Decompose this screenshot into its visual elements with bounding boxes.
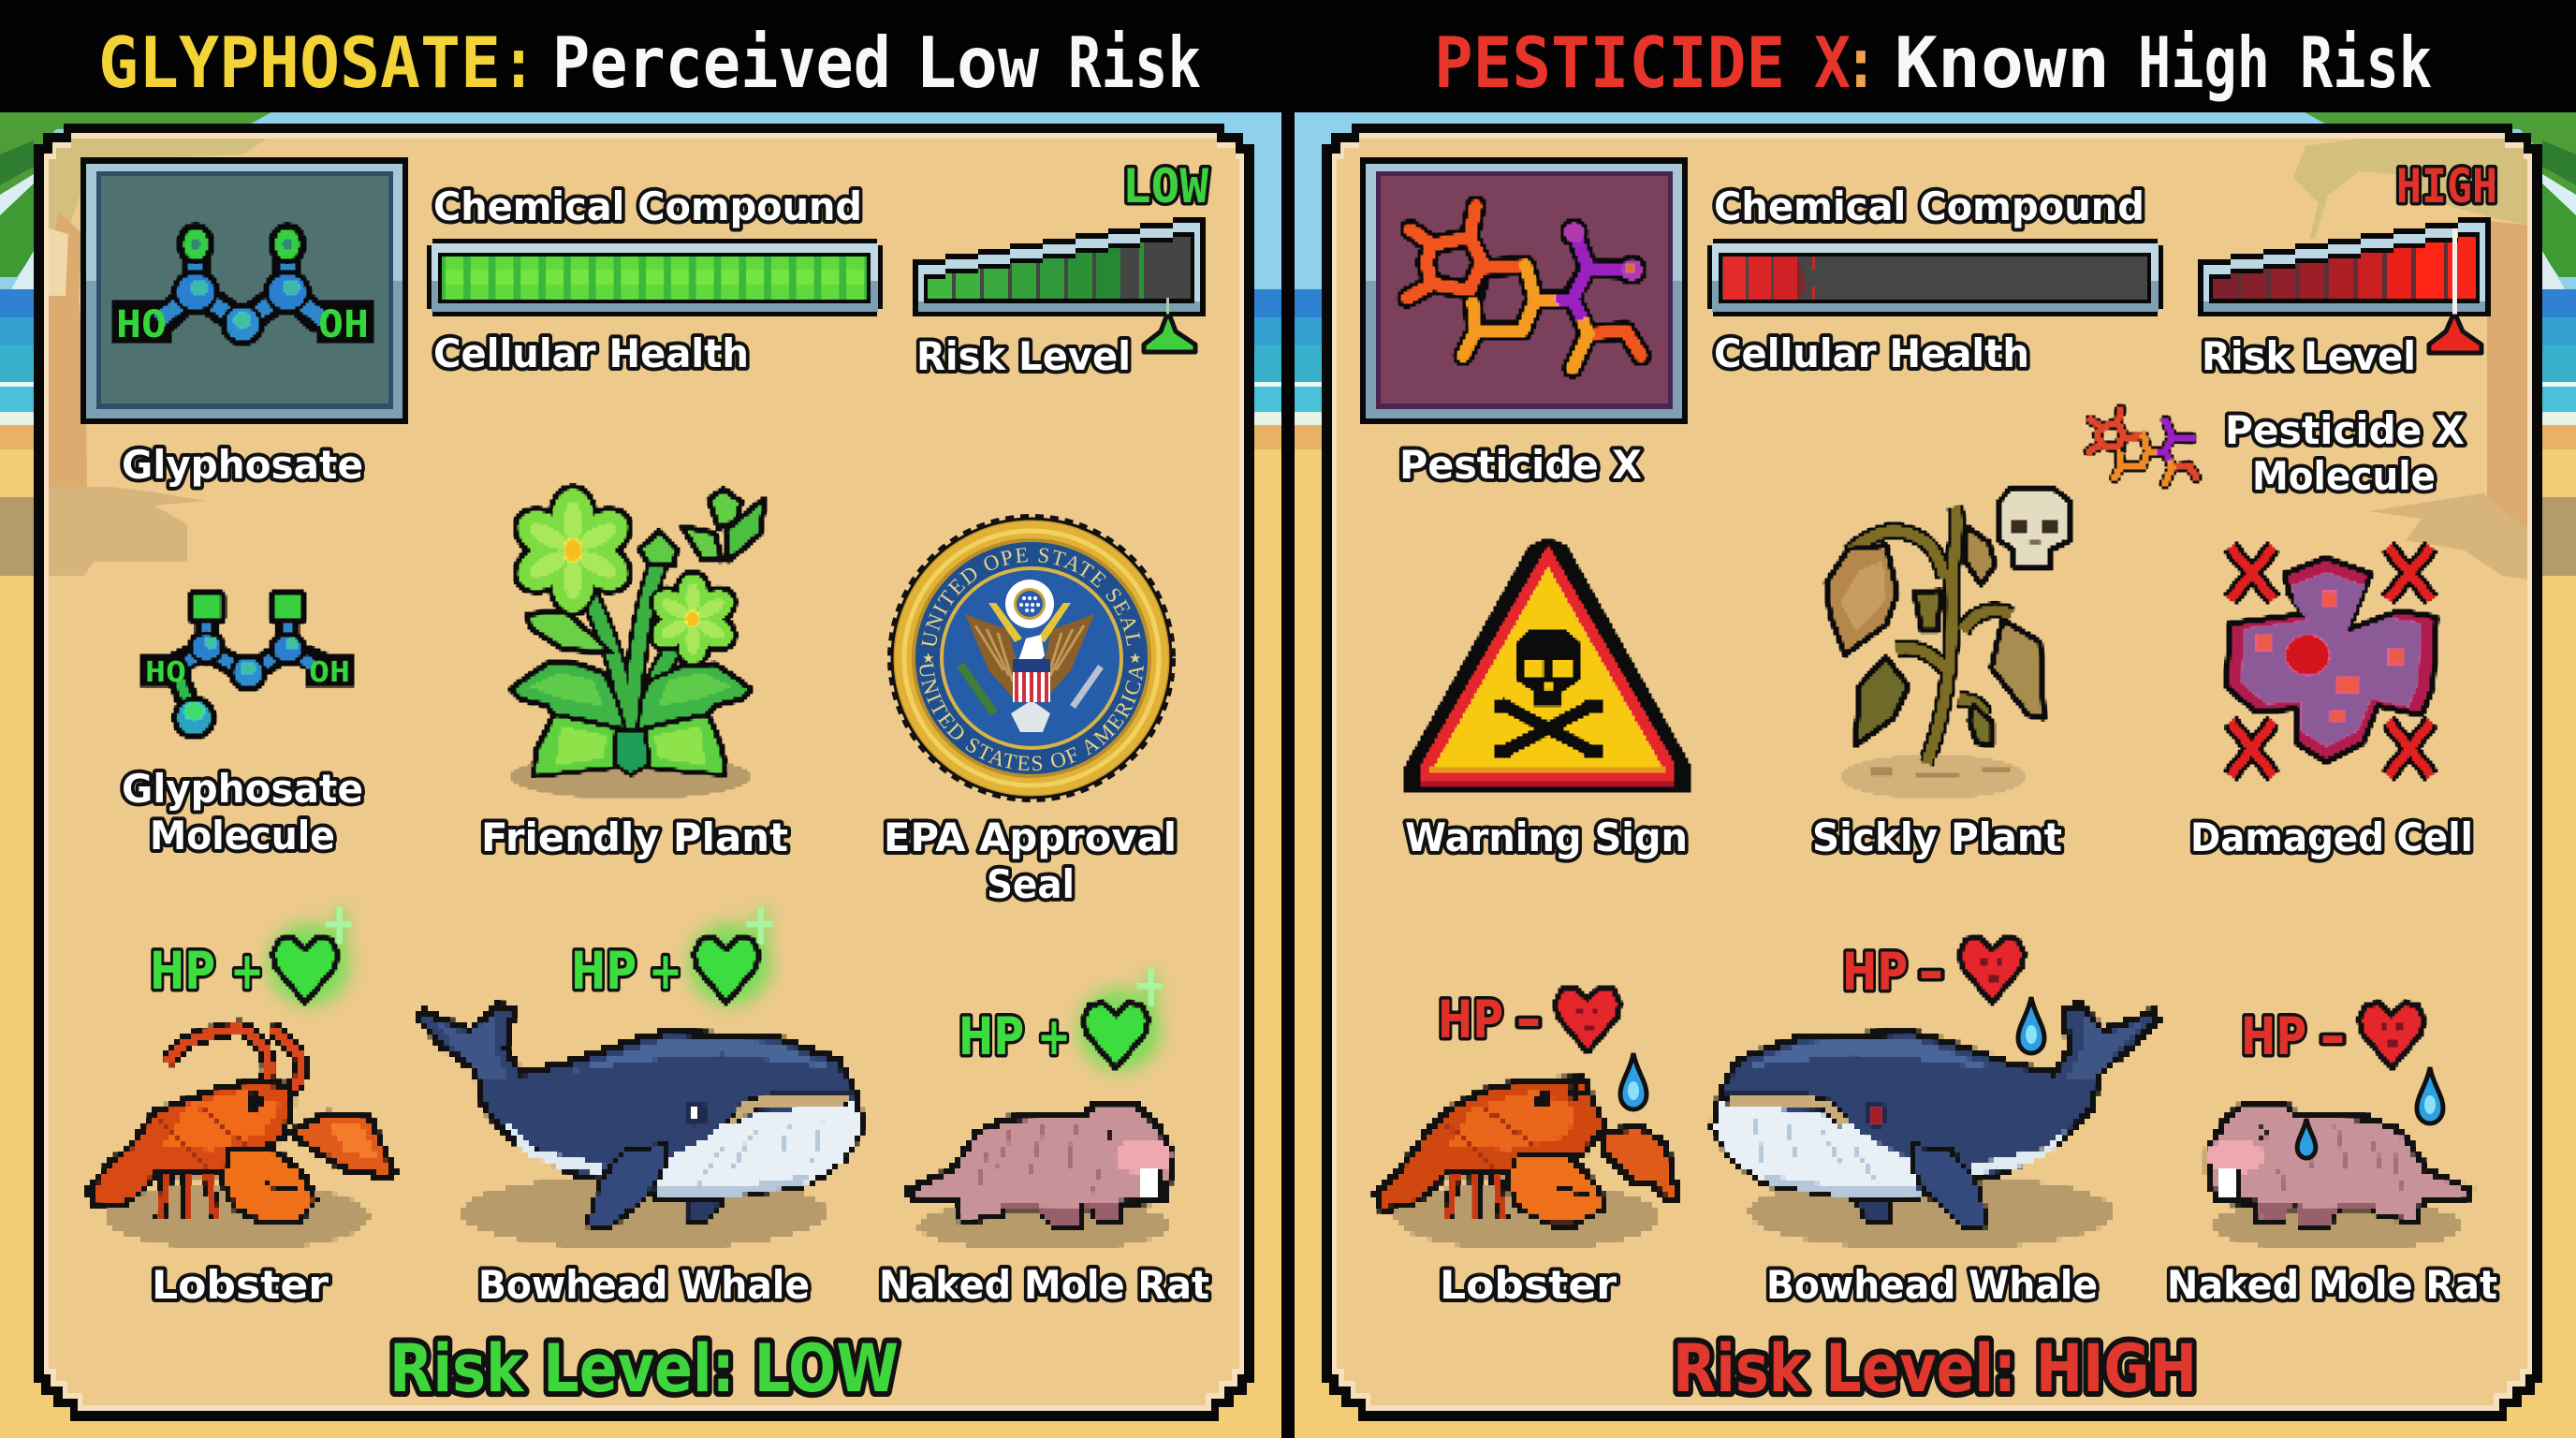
- label: friendly plant: Friendly Plant: [481, 814, 788, 860]
- label: cellular health: Cellular Health: [1714, 330, 2029, 376]
- risk meter: low: [913, 217, 1206, 352]
- verdict: risk level low: Risk Level: LOW: [389, 1330, 899, 1407]
- label: hp up mole rat: HP: [959, 1006, 1024, 1066]
- label: hp down whale: HP: [1842, 942, 1908, 1002]
- label: pesticide x molecule: [2225, 407, 2465, 499]
- label: warning sign: Warning Sign: [1405, 814, 1688, 860]
- panel frame: [1322, 124, 2542, 1421]
- label: hp up lobster: HP: [150, 941, 215, 1001]
- label: high: HIGH: [2396, 159, 2497, 213]
- label: hp down mole rat: -: [2320, 1006, 2346, 1066]
- title: glyphosate perceived low risk: Perceived: [552, 22, 891, 104]
- risk marker: low: [1144, 316, 1195, 352]
- label: EPA approval seal: EPA Approval: [884, 814, 1177, 860]
- header bar: [0, 0, 2576, 112]
- compound card: glyphosate: OH: [318, 303, 369, 346]
- label: risk level: Risk Level: [916, 333, 1131, 379]
- icon: bowhead whale healthy: [419, 1005, 862, 1249]
- icon: naked mole rat unhealthy: [2208, 1107, 2471, 1250]
- label: glyphosate molecule: [122, 766, 363, 858]
- label: hp up whale: HP: [571, 941, 637, 1001]
- icon: friendly plant: [510, 490, 765, 799]
- label: hp down lobster: HP: [1438, 990, 1503, 1049]
- label: sickly plant: Sickly Plant: [1812, 814, 2062, 860]
- label: chemical compound: Chemical Compound: [1714, 183, 2144, 229]
- small molecule atom text: [145, 656, 350, 689]
- cellular health bar: full: [427, 239, 883, 316]
- label: pesticide x: Pesticide X: [1399, 442, 1642, 488]
- label: EPA approval seal: [884, 814, 1177, 907]
- label: pesticide x molecule: Pesticide X: [2225, 407, 2465, 453]
- title: pesticide x known high risk: Risk: [2300, 22, 2432, 104]
- icon: EPA approval seal: ★: [1129, 650, 1141, 667]
- label: lobster: Lobster: [1440, 1262, 1617, 1308]
- label: naked mole rat: Naked Mole Rat: [879, 1262, 1209, 1308]
- title: glyphosate perceived low risk: GLYPHOSATE: [98, 22, 501, 104]
- label: low: LOW: [1122, 159, 1209, 213]
- label: bowhead whale: Bowhead Whale: [1766, 1262, 2098, 1308]
- title: pesticide x known high risk: X: [1814, 22, 1851, 104]
- title: glyphosate perceived low risk: [98, 22, 1201, 104]
- icon: bowhead whale unhealthy: [1714, 1005, 2157, 1249]
- title: pesticide x known high risk: PESTICIDE: [1434, 22, 1785, 104]
- hp boost glows: [268, 908, 1161, 1071]
- icon: glyphosate molecule: [140, 593, 354, 737]
- risk marker: high: [2429, 316, 2481, 353]
- icon: warning sign: [1405, 538, 1691, 792]
- risk meter: high: [2198, 217, 2491, 353]
- compound card: pesticide x: [1360, 157, 1688, 424]
- cellular health bar: depleted: [1707, 239, 2163, 316]
- icon: EPA approval seal: UNITED OPE STATE SEAL: [921, 548, 1140, 646]
- label: bowhead whale: Bowhead Whale: [478, 1262, 810, 1308]
- title: pesticide x known high risk: :: [1844, 22, 1878, 104]
- label: hp up mole rat: +: [1037, 1006, 1071, 1066]
- label: glyphosate: Glyphosate: [122, 442, 363, 488]
- icon: damaged hearts: [1556, 938, 2423, 1067]
- label: hp up lobster: +: [230, 941, 264, 1001]
- compound card: glyphosate: [80, 157, 408, 424]
- icon: glyphosate molecule in card: [112, 227, 373, 343]
- icon: EPA approval seal: ★: [922, 650, 934, 667]
- label: glyphosate molecule: Molecule: [150, 813, 335, 858]
- verdict: risk level high: Risk Level: HIGH: [1673, 1330, 2197, 1407]
- label: EPA approval seal: Seal: [987, 861, 1075, 907]
- small molecule atom text: HO: [145, 656, 186, 689]
- title: pesticide x known high risk: High: [2138, 22, 2270, 104]
- icon: EPA approval seal: [887, 514, 1176, 802]
- title: glyphosate perceived low risk: Low: [915, 22, 1040, 104]
- panel: glyphosate: [34, 124, 1254, 1421]
- title: pesticide x known high risk: Known: [1895, 22, 2110, 104]
- label: damaged cell: Damaged Cell: [2190, 814, 2473, 860]
- label: pesticide x molecule: Molecule: [2252, 453, 2436, 499]
- icon: damaged cell: [2227, 548, 2436, 775]
- icon: sweat drops: [1620, 997, 2443, 1158]
- label: hp down mole rat: HP: [2241, 1006, 2306, 1066]
- label: hp down whale: -: [1918, 942, 1944, 1002]
- label: naked mole rat: Naked Mole Rat: [2167, 1262, 2497, 1308]
- title: pesticide x known high risk: [1434, 22, 2432, 104]
- icon: naked mole rat healthy: [908, 1107, 1171, 1250]
- label: glyphosate molecule: Glyphosate: [122, 766, 363, 812]
- icon: lobster healthy: [89, 1028, 394, 1249]
- label: cellular health: Cellular Health: [433, 330, 749, 376]
- title: glyphosate perceived low risk: :: [502, 22, 535, 104]
- icon: pesticide x molecule small: [2089, 409, 2197, 483]
- center divider: [1281, 0, 1295, 1438]
- icon: lobster unhealthy: [1377, 1079, 1678, 1249]
- label: risk level: Risk Level: [2202, 333, 2416, 379]
- panel: pesticide x: [1322, 124, 2542, 1421]
- label: hp down lobster: -: [1515, 990, 1542, 1049]
- icon: sickly plant with skull: [1827, 490, 2069, 799]
- label: hp up whale: +: [649, 941, 682, 1001]
- icon: EPA approval seal: UNITED STATES OF AMERICA: [919, 662, 1144, 771]
- panel frame: [34, 124, 1254, 1421]
- icon: pesticide molecule in card: [1407, 206, 1647, 368]
- label: lobster: Lobster: [152, 1262, 329, 1308]
- title: glyphosate perceived low risk: Risk: [1068, 22, 1201, 104]
- label: chemical compound: Chemical Compound: [433, 183, 862, 229]
- icon: hearts with sparkles: [273, 906, 1164, 1067]
- small molecule atom text: OH: [309, 656, 350, 689]
- compound card: glyphosate: HO: [116, 303, 167, 346]
